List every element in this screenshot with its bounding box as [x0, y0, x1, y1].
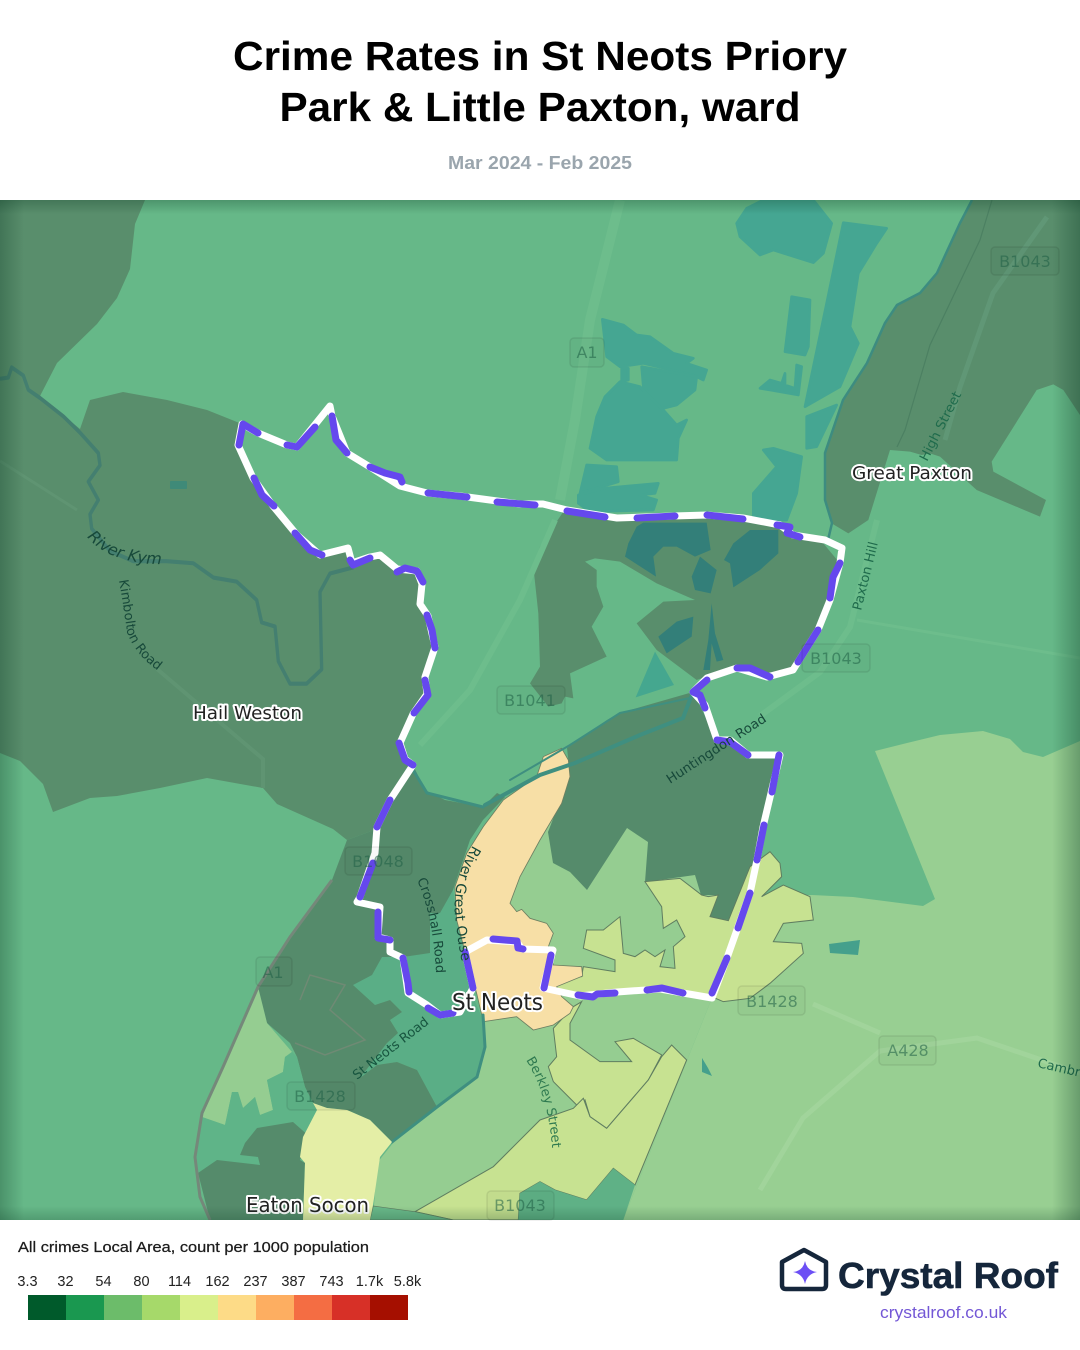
- area: dark north St Neots and lakes: [530, 512, 840, 707]
- legend tick labels: 1.7k: [356, 1274, 384, 1290]
- icon: house with star: [782, 1250, 826, 1289]
- place: Hail Weston: Hail Weston: [193, 703, 302, 724]
- logo wordmark: Crystal Roof: [838, 1255, 1059, 1296]
- area: dark north-west: [0, 200, 145, 396]
- shield: B1428 east: [738, 986, 805, 1015]
- legend tick labels: 162: [205, 1274, 230, 1290]
- wedge west of the A1: [195, 880, 392, 1220]
- road and river labels: [87, 389, 1080, 1148]
- label: St Neots Road: St Neots Road: [350, 1015, 432, 1083]
- shield: B1428 east: B1428: [746, 992, 798, 1011]
- legend tick labels: 387: [281, 1274, 306, 1290]
- shield: B1043 north-east: [991, 247, 1059, 275]
- logo url: crystalroof.co.uk: [880, 1304, 1008, 1322]
- roads: [261, 216, 1048, 788]
- label: Huntingdon Road: Huntingdon Road: [664, 712, 769, 787]
- area: yellow-green east: [370, 748, 813, 1220]
- legend tick labels: 3.3: [17, 1274, 38, 1290]
- map: [0, 200, 1080, 1220]
- map base: mid-green area: [0, 200, 1080, 1220]
- ward boundary: white base: [238, 406, 842, 1015]
- legend tick labels: 743: [319, 1274, 344, 1290]
- shield: B1043 south: B1043: [494, 1196, 546, 1215]
- logo: Crystal Roof: [782, 1250, 1059, 1322]
- legend tick labels: 237: [243, 1274, 268, 1290]
- area: mid green southern patch: [518, 1168, 635, 1220]
- title: Crime Rates in St Neots Priory: [233, 33, 847, 79]
- shield: B1043 south: [487, 1191, 554, 1220]
- lakes north: [578, 200, 832, 520]
- label: Kimbolton Road: Kimbolton Road: [119, 580, 163, 670]
- shield: B1043 north-east: B1043: [999, 252, 1051, 271]
- east roads: [760, 1004, 1080, 1190]
- area: dark St Neots west: [258, 765, 505, 1142]
- title: [233, 33, 847, 130]
- place: St Neots: St Neots: [452, 990, 543, 1016]
- area: dark wedge south: [198, 1122, 310, 1220]
- shield: B1428 west: [287, 1082, 355, 1110]
- area: yellow-green south: [548, 1002, 662, 1128]
- shield: B1048: B1048: [352, 852, 404, 871]
- shield: B1043 centre: B1043: [810, 649, 862, 668]
- thin road in Great Paxton band: [897, 200, 992, 447]
- area: tan St Neots centre: [455, 748, 583, 1030]
- label: River Kym: River Kym: [87, 530, 161, 566]
- place: Great Paxton: Great Paxton: [852, 463, 972, 484]
- ward boundary: purple dashes: [239, 416, 840, 1015]
- label: Paxton Hill: Paxton Hill: [850, 540, 882, 612]
- area: light green wedge: [202, 987, 292, 1125]
- place: Eaton Socon: Eaton Socon: [246, 1193, 369, 1217]
- legend tick labels: 32: [57, 1274, 74, 1290]
- river Great Ouse south: [392, 692, 693, 1142]
- legend tick labels: 5.8k: [394, 1274, 422, 1290]
- area: mid green wedge: [204, 1052, 305, 1125]
- legend tick labels: [17, 1274, 422, 1290]
- shield: B1428 west: B1428: [294, 1087, 346, 1106]
- label: Crosshall Road: Crosshall Road: [418, 878, 446, 972]
- shield: A1 north: A1: [576, 343, 598, 362]
- area: pale yellow Eaton Socon: [300, 1103, 392, 1220]
- legend tick labels: 114: [168, 1274, 191, 1290]
- label: River Great Ouse: River Great Ouse: [454, 846, 482, 960]
- area: dark east of river (Huntingdon Road): [548, 692, 780, 920]
- legend colour scale: [28, 1295, 408, 1320]
- area: light green east: [623, 731, 1080, 1220]
- map edge shading: [0, 200, 1080, 1220]
- road shields: [256, 247, 1059, 1220]
- shield: A1 south: [256, 957, 292, 986]
- legend tick labels: 54: [95, 1274, 112, 1290]
- area: mid green south-west of river: [353, 890, 485, 1107]
- area: dark Hail Weston: [0, 367, 435, 840]
- river Great Ouse north edge: [825, 200, 972, 540]
- legend tick labels: 80: [133, 1274, 150, 1290]
- shield: B1041: [497, 686, 565, 714]
- legend title: All crimes Local Area, count per 1000 population: [18, 1240, 369, 1256]
- shield: B1041: B1041: [504, 691, 556, 710]
- subtitle: date range: Mar 2024 - Feb 2025: [448, 153, 632, 173]
- small water patches: [170, 481, 860, 1076]
- label: Berkley Street: Berkley Street: [526, 1056, 561, 1148]
- legend: [17, 1240, 422, 1320]
- River Kym: [0, 367, 353, 684]
- shield: A428: A428: [887, 1041, 929, 1060]
- title: Park & Little Paxton, ward: [280, 84, 800, 130]
- place labels: [193, 463, 972, 1217]
- area: dark Great Paxton band: [825, 200, 1080, 533]
- shield: B1043 centre: [802, 644, 870, 672]
- shield: B1048: [345, 847, 412, 875]
- shield: A1 south: A1: [262, 963, 284, 982]
- shield: A428: [879, 1036, 936, 1065]
- shield: A1 north: [570, 338, 604, 367]
- label: High Street: High Street: [917, 389, 965, 464]
- area: light green central: [374, 818, 728, 1213]
